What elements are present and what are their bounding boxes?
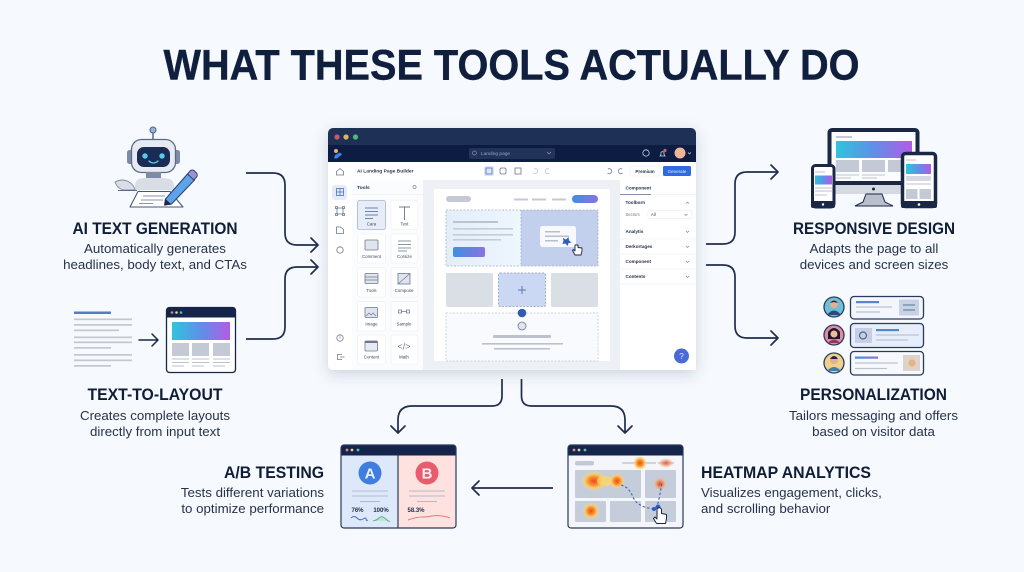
hero block [446, 210, 598, 266]
icon: responsive devices [811, 130, 937, 208]
panel: AI landing page builder window [328, 128, 696, 370]
icon: A/B test window: 58.3% [407, 508, 425, 514]
toolbar: Generate [668, 169, 687, 174]
icon: text document to layout [74, 308, 236, 372]
text: AI text generation description: headlines, body text, and CTAs [63, 257, 247, 272]
icon: A/B test window: 76% [351, 508, 364, 514]
text: heatmap analytics description: Visualizes engagement, clicks, [701, 485, 882, 500]
tool card: Cara: Cara [367, 222, 377, 226]
row: visitor two [824, 324, 924, 348]
tool card: Corsize [391, 234, 418, 263]
right properties panel: Component [626, 259, 651, 264]
tool card: Tools: Tools [366, 288, 377, 293]
arrow: builder to personalization [706, 265, 778, 338]
icon: personalized audience rows [824, 296, 924, 375]
tool card: Image: Image [365, 322, 378, 326]
text: personalization description: Tailors messaging and offers [789, 408, 958, 423]
heading: personalization: PERSONALIZATION [800, 385, 947, 404]
right properties panel: Derkortages [626, 244, 653, 249]
help button [674, 348, 689, 364]
text: personalization description: based on visitor data [812, 424, 935, 439]
left icon sidebar [332, 168, 347, 360]
canvas area [423, 180, 620, 370]
arrow: builder to A/B testing [398, 379, 502, 433]
right properties panel: Analytis [626, 229, 644, 234]
page header [446, 195, 598, 203]
toolbar [357, 166, 691, 176]
text: heatmap analytics description [701, 485, 882, 516]
icon: A/B test window: A [365, 466, 376, 482]
tool card: Corsize: Corsize [397, 254, 412, 259]
text: A/B testing description: Tests different variations [181, 485, 324, 500]
toolbar: Premium [635, 169, 655, 174]
row: visitor one [824, 296, 924, 319]
tool card: Text: Text [400, 222, 409, 226]
right properties panel: Component [626, 186, 651, 190]
text: AI text generation description [63, 241, 247, 272]
heading: text-to-layout: TEXT-TO-LAYOUT [88, 385, 223, 404]
tool card: Text [391, 200, 418, 230]
row: visitor three [824, 352, 924, 375]
tool card: Tools [358, 268, 386, 297]
heading: heatmap analytics: HEATMAP ANALYTICS [701, 463, 871, 482]
tools panel: Tools [357, 185, 370, 191]
arrow: text-to-layout to builder [246, 267, 318, 339]
icon: robot writing [115, 127, 197, 207]
title bar [328, 128, 696, 145]
tool card: Comment: Comment [362, 254, 382, 259]
text: AI text generation description: Automatically generates [84, 241, 226, 256]
tools panel [352, 180, 423, 370]
tool card: Comment [358, 234, 386, 263]
tool card: Math [391, 335, 418, 364]
right properties panel: Sectors [626, 212, 640, 217]
icon: A/B test window: B [422, 466, 433, 482]
arrow: builder to heatmap analytics [522, 379, 625, 433]
text: responsive design description: Adapts the page to all [810, 241, 938, 256]
tool card: Compose: Compose [395, 288, 414, 293]
tool card: Compose [391, 268, 418, 297]
navigation bar [328, 145, 696, 162]
text: heatmap analytics description: and scrolling behavior [701, 501, 831, 516]
tool card: Content [358, 335, 386, 364]
floating text card with cursor [540, 226, 582, 255]
text: A/B testing description: to optimize performance [181, 501, 324, 516]
navigation bar: Landing page [481, 151, 510, 157]
heading: responsive design: RESPONSIVE DESIGN [793, 219, 955, 238]
lower dashed section [446, 309, 598, 361]
icon: heatmap analytics window [568, 445, 683, 528]
icon: A/B test window: 100% [373, 508, 389, 514]
text: text-to-layout description: Creates complete layouts [80, 408, 230, 423]
toolbar: AI Landing Page Builder [357, 168, 414, 174]
text: personalization description [789, 408, 958, 439]
text: A/B testing description [181, 485, 324, 516]
tool card: Math: </> [397, 342, 411, 352]
tool card: Sample: Sample [397, 322, 412, 326]
arrow: builder to responsive design [706, 172, 778, 244]
arrow: heatmap analytics to A/B testing [472, 487, 553, 489]
arrow: AI text generation to builder [246, 173, 318, 245]
placeholder card row [446, 273, 598, 307]
right properties panel: Contents [626, 274, 646, 279]
tool card: Image [358, 302, 386, 331]
tool card: Sample [391, 302, 418, 331]
text: text-to-layout description [80, 408, 230, 439]
icon: A/B test window [341, 445, 456, 528]
heading: AI text generation: AI TEXT GENERATION [72, 219, 238, 238]
right properties panel: All [651, 212, 656, 217]
text: text-to-layout description: directly from input text [90, 424, 220, 439]
tool card: Cara [358, 200, 386, 230]
tool card: Content: Content [364, 354, 380, 360]
heading: A/B testing: A/B TESTING [224, 463, 324, 482]
right properties panel [620, 180, 696, 370]
text: responsive design description: devices and screen sizes [800, 257, 949, 272]
help button: ? [679, 351, 684, 361]
title: WHAT THESE TOOLS ACTUALLY DO [164, 42, 860, 90]
tool card: Math: Math [399, 354, 409, 360]
text: responsive design description [800, 241, 949, 272]
right properties panel: Toolborn [626, 200, 645, 205]
